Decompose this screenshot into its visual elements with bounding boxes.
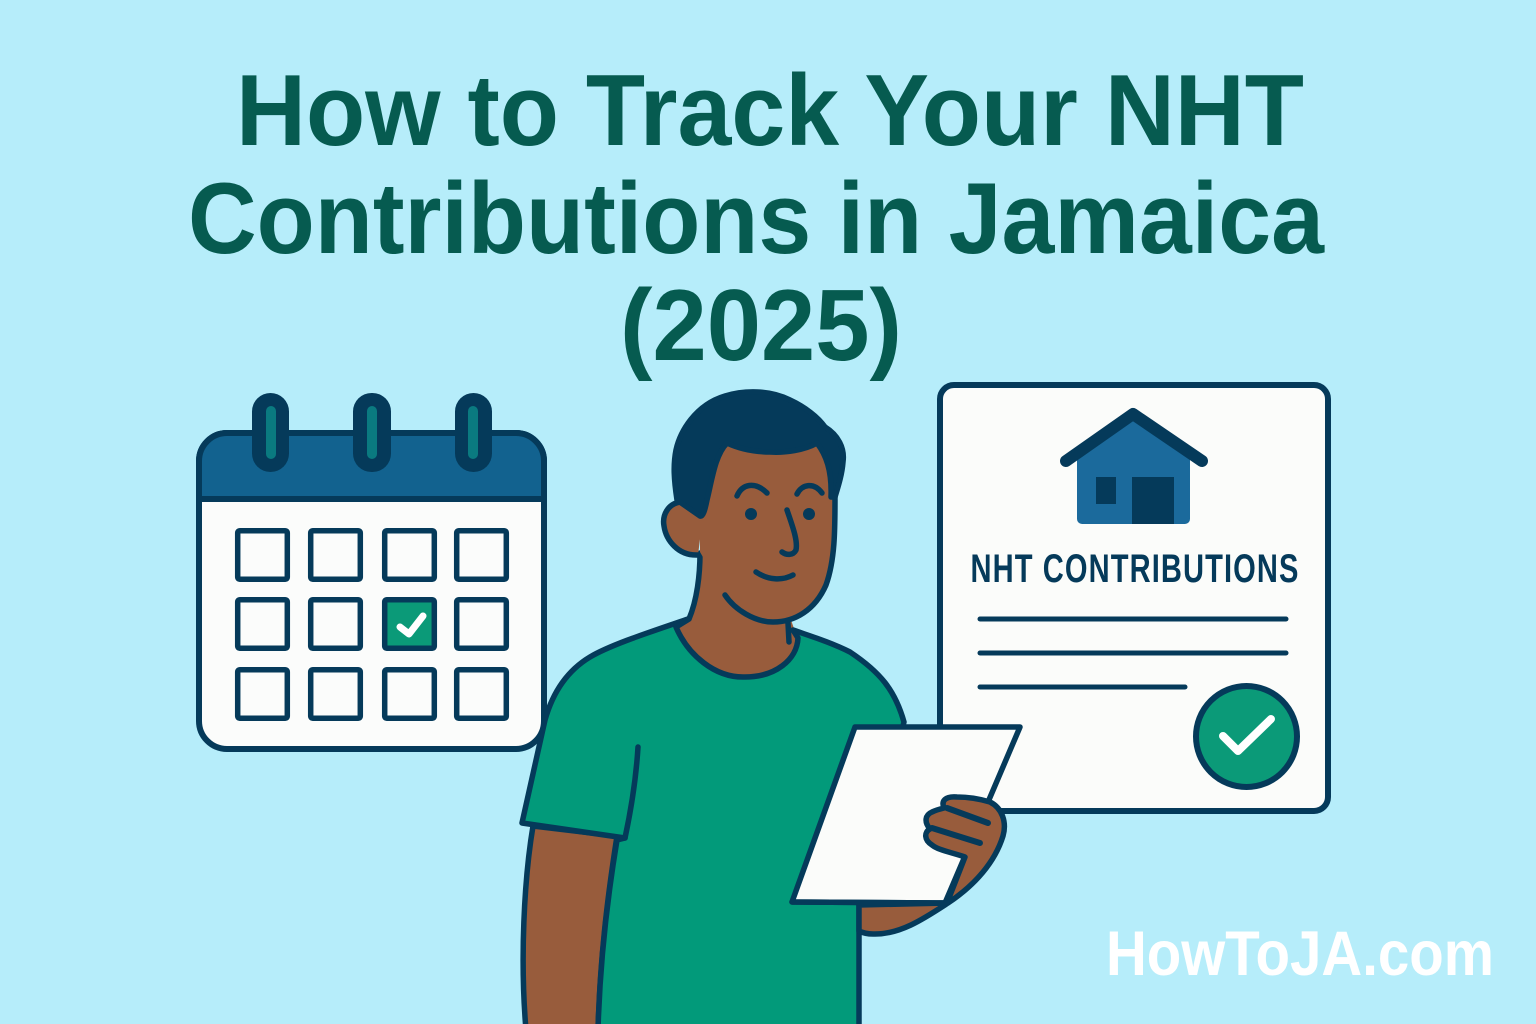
ear (664, 500, 705, 555)
neck (676, 552, 797, 677)
sleeve edge (625, 747, 638, 838)
calendar rings (252, 393, 492, 472)
face details (737, 485, 822, 579)
hair (674, 392, 843, 516)
calendar check (400, 616, 423, 634)
title (188, 55, 1325, 382)
icon: calendar (199, 393, 544, 749)
document lines (980, 619, 1286, 687)
ear outline (664, 502, 698, 555)
fingers (932, 808, 988, 843)
face (700, 438, 836, 622)
icon: house (1066, 414, 1202, 524)
icon: approved check (1196, 686, 1297, 787)
left arm (523, 826, 617, 1024)
face outline (725, 497, 835, 622)
panel: NHT document (940, 385, 1328, 811)
document heading: NHT CONTRIBUTIONS (970, 547, 1300, 591)
calendar header (199, 433, 544, 499)
paper bottom edge (792, 902, 947, 903)
calendar grid (238, 531, 506, 718)
neck outline and collar (676, 553, 798, 677)
eyes (745, 508, 815, 520)
watermark: HowToJA.com (1106, 919, 1494, 989)
paper (792, 727, 1020, 903)
title: How to Track Your NHT (236, 55, 1304, 167)
title: Contributions in Jamaica (188, 163, 1325, 275)
title: (2025) (620, 270, 902, 382)
hand (859, 797, 1004, 934)
person (522, 392, 1020, 1024)
shirt (522, 619, 904, 1024)
